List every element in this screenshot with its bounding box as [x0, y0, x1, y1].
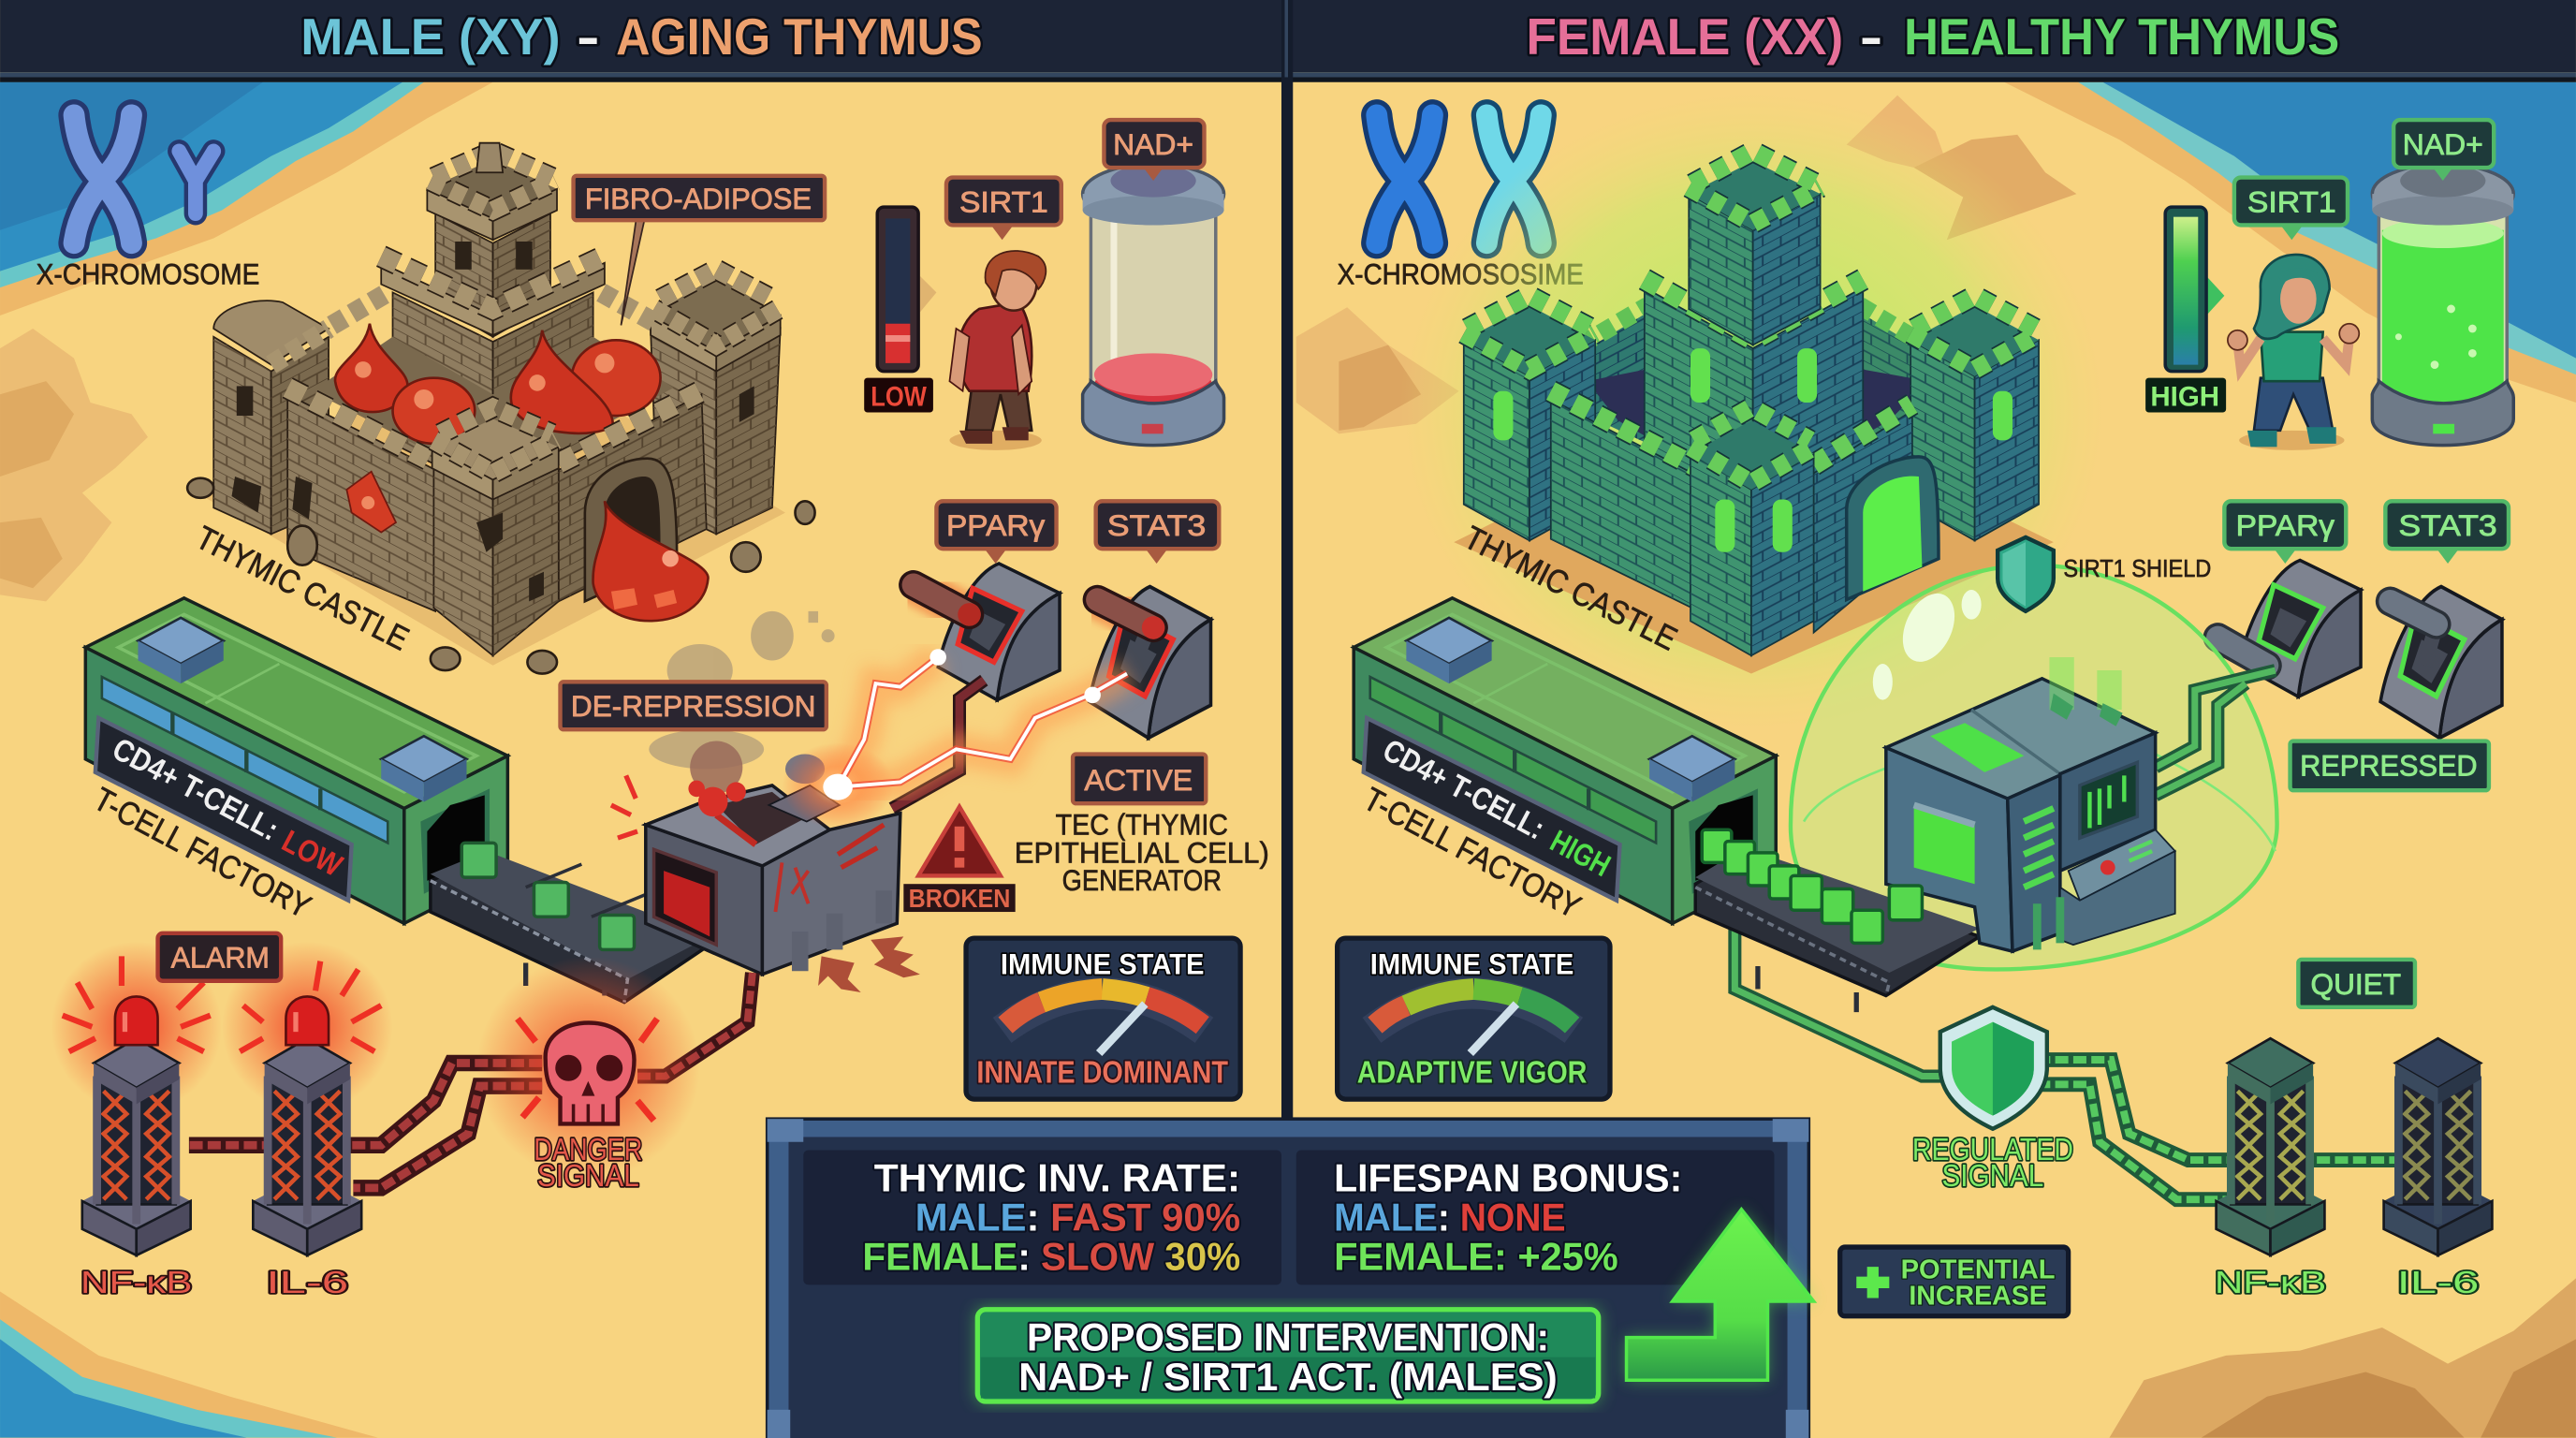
- signal cables: [2037, 1060, 2415, 1199]
- thymic castle, healthy: [1454, 151, 2054, 674]
- panel: male aging thymus: [0, 82, 1269, 1438]
- proposed intervention button: PROPOSED INTERVENTION:: [1027, 1315, 1549, 1359]
- back walls: [1577, 305, 1930, 444]
- HIGH label: HIGH: [2150, 381, 2219, 412]
- active callout: ACTIVE: [1084, 763, 1193, 797]
- sand dunes left: [1296, 307, 1459, 433]
- proposed intervention button: [976, 1308, 1600, 1403]
- T-cell factory: [1354, 598, 1776, 923]
- SIRT1 callout: [946, 178, 1061, 240]
- IL-6 label: IL-6: [266, 1266, 348, 1300]
- chromosome Y: [179, 151, 213, 213]
- front left wall: [1551, 391, 1699, 611]
- castle glow: [1399, 91, 2106, 731]
- TEC generator label: TEC (THYMIC: [1056, 808, 1228, 842]
- rubble: [187, 478, 815, 674]
- cables to switches: [892, 681, 984, 808]
- quiet callout: [2298, 960, 2415, 1007]
- regulated shield icon: [1940, 1007, 2047, 1129]
- front right wall: [559, 391, 707, 601]
- IL-6 alarm tower: [222, 942, 393, 1255]
- title: female: FEMALE (XX): [1526, 8, 1843, 66]
- header bar: [0, 0, 2576, 82]
- front left wall: [287, 388, 435, 611]
- potential increase badge: INCREASE: [1909, 1281, 2047, 1311]
- right tower: [651, 270, 781, 534]
- broken label: BROKEN: [909, 884, 1010, 913]
- chromosome X blue: [1377, 115, 1432, 243]
- SIRT1 level bar low: [877, 207, 936, 372]
- factory label: T-CELL FACTORY: [1357, 781, 1587, 926]
- potential increase badge: POTENTIAL: [1901, 1255, 2056, 1284]
- repressed callout: [2291, 741, 2489, 790]
- NF-kB tower, quiet: [2217, 1038, 2324, 1255]
- alarm callout: [158, 933, 281, 981]
- keep: [381, 257, 605, 493]
- PPAR-gamma callout: PPARγ: [2236, 508, 2334, 542]
- TEC generator label: EPITHELIAL CELL): [1015, 835, 1269, 869]
- front tower: [432, 407, 559, 655]
- callout: fibro-adipose: FIBRO-ADIPOSE: [585, 182, 812, 215]
- SIRT1 shield icon: [1998, 537, 2054, 611]
- X-chromosome label: X-CHROMOSOSIME: [1338, 257, 1584, 291]
- danger signal label: DANGER: [534, 1133, 642, 1167]
- cables to switches: [2156, 670, 2276, 795]
- NF-kB label: NF-κB: [2215, 1266, 2326, 1300]
- chromosome X: [74, 115, 131, 243]
- STAT3 callout: [2385, 501, 2509, 564]
- back wall merlons: [332, 292, 654, 325]
- TEC generator label: [1015, 808, 1269, 897]
- NAD+ callout: [2393, 120, 2494, 181]
- lifespan bonus stats: [1296, 1151, 1774, 1284]
- SIRT1 callout: SIRT1: [959, 184, 1048, 218]
- conveyor belt: [431, 851, 710, 1003]
- repressed callout: REPRESSED: [2300, 748, 2478, 782]
- cable generator to skull: [637, 973, 753, 1077]
- regulated signal label: REGULATED: [1912, 1133, 2073, 1167]
- sand dunes left: [0, 329, 148, 601]
- danger cables: [189, 1064, 542, 1188]
- factory sign: LOW: [276, 824, 348, 884]
- healthy female figure: [2228, 255, 2359, 450]
- lightning arcs: [782, 649, 1127, 829]
- NAD+ tank full: [2372, 165, 2513, 446]
- arrow: potential increase: [1627, 1210, 1814, 1380]
- NAD+ callout: [1104, 120, 1204, 181]
- immune state gauge: male: [966, 938, 1240, 1099]
- courtyard wall behind blobs: [313, 337, 674, 485]
- de-repression callout: [561, 682, 827, 729]
- NAD+ callout: NAD+: [1113, 127, 1193, 161]
- title: female: [1526, 8, 2339, 66]
- danger signal label: SIGNAL: [537, 1159, 639, 1194]
- SIRT1 shield label: SIRT1 SHIELD: [2063, 556, 2211, 582]
- title: male: AGING THYMUS: [616, 8, 983, 66]
- de-repression callout: DE-REPRESSION: [571, 689, 815, 723]
- factory sign: HIGH: [1544, 824, 1616, 884]
- proposed intervention button: NAD+ / SIRT1 ACT. (MALES): [1018, 1355, 1558, 1399]
- conveyor belt: [1695, 848, 1980, 1012]
- SIRT1 level bar high: [2165, 207, 2224, 372]
- IL-6 tower, quiet: [2384, 1038, 2492, 1255]
- left tower: [1464, 296, 1595, 540]
- title: female: -: [1860, 8, 1882, 66]
- front right wall: [1814, 404, 1939, 633]
- inversion rate stats: THYMIC INV. RATE:: [874, 1155, 1240, 1199]
- switch PPAR-gamma active: [914, 564, 1060, 700]
- smoke: [649, 611, 835, 769]
- potential increase badge: [1840, 1247, 2069, 1316]
- immune state gauge: female: [1338, 938, 1610, 1099]
- green T-cell cubes: [461, 843, 634, 949]
- X-chromosome label: X-CHROMOSOME: [37, 257, 259, 291]
- immune state gauge: male: INNATE DOMINANT: [976, 1056, 1228, 1091]
- STAT3 callout: [1096, 501, 1219, 564]
- chromosome X cyan: [1486, 115, 1541, 243]
- danger signal label: [534, 1133, 642, 1194]
- fire and smoke on generator: [611, 741, 746, 838]
- STAT3 callout: STAT3: [1107, 508, 1206, 542]
- switch STAT3 repressed: [2380, 587, 2502, 738]
- title: male: -: [577, 8, 600, 66]
- immune state gauge: male: IMMUNE STATE: [1001, 947, 1204, 981]
- immune state gauge: female: ADAPTIVE VIGOR: [1357, 1056, 1587, 1091]
- big blob at gate: [593, 501, 708, 621]
- spire tower: [1689, 151, 1821, 345]
- tired male figure: [949, 251, 1046, 450]
- thymic castle, ruined: [187, 143, 815, 674]
- quiet callout: QUIET: [2311, 967, 2401, 1001]
- spire tower: [427, 143, 557, 337]
- switch PPAR-gamma repressed: [2217, 560, 2361, 697]
- thymic castle label: THYMIC CASTLE: [1458, 520, 1683, 658]
- T-cell factory: [85, 598, 507, 923]
- dark courtyard gaps: [1587, 368, 1928, 440]
- left tower: [213, 301, 329, 534]
- ocean top right: [2004, 82, 2576, 403]
- broken generator: [646, 755, 900, 975]
- inversion rate stats: [803, 1151, 1281, 1284]
- title: male: MALE (XY): [300, 8, 561, 66]
- lifespan bonus stats: MALE: NONE: [1334, 1196, 1566, 1240]
- title: male: [300, 8, 983, 66]
- STAT3 callout: STAT3: [2398, 508, 2497, 542]
- blood splatter: [818, 936, 920, 992]
- regulated signal label: SIGNAL: [1942, 1159, 2043, 1194]
- LOW label: LOW: [871, 381, 928, 412]
- fibro-adipose blobs: [335, 324, 661, 444]
- lifespan bonus stats: LIFESPAN BONUS:: [1334, 1155, 1682, 1199]
- NAD+ tank low: [1083, 165, 1224, 446]
- inversion rate stats: FEMALE: SLOW 30%: [862, 1235, 1240, 1279]
- keep: [1645, 279, 1863, 513]
- ocean bottom left: [0, 1291, 378, 1438]
- factory label: T-CELL FACTORY: [88, 781, 316, 926]
- icon: danger skull: [476, 956, 700, 1180]
- cable conveyor to shield: [1734, 925, 1947, 1077]
- SIRT1 callout: SIRT1: [2247, 184, 2336, 218]
- PPAR-gamma callout: PPARγ: [946, 508, 1045, 542]
- NF-kB alarm tower: [51, 942, 222, 1255]
- thymic castle label: THYMIC CASTLE: [190, 520, 415, 658]
- healthy generator: [1886, 657, 2175, 951]
- icon: warning triangle: [918, 807, 1001, 875]
- TEC generator label: GENERATOR: [1062, 863, 1222, 897]
- IL-6 label: IL-6: [2397, 1266, 2479, 1300]
- PPAR-gamma callout: [936, 501, 1057, 564]
- inversion rate stats: MALE: FAST 90%: [915, 1196, 1240, 1240]
- PPAR-gamma callout: [2224, 501, 2346, 564]
- factory sign: CD4+ T-CELL:: [107, 732, 284, 848]
- NAD+ callout: NAD+: [2403, 127, 2483, 161]
- front tower: [1690, 407, 1814, 655]
- NF-kB label: NF-κB: [80, 1266, 192, 1300]
- alarm callout: ALARM: [171, 941, 270, 975]
- sand dunes top: [1847, 95, 2076, 240]
- lifespan bonus stats: FEMALE: +25%: [1334, 1235, 1618, 1279]
- active callout: [1073, 755, 1206, 803]
- center divider: [1281, 0, 1293, 1125]
- title: female: HEALTHY THYMUS: [1904, 8, 2339, 66]
- callout: fibro-adipose: [574, 176, 825, 325]
- factory sign: CD4+ T-CELL:: [1377, 733, 1550, 846]
- panel: female healthy thymus: [1296, 82, 2576, 1438]
- SIRT1 callout: [2234, 178, 2348, 240]
- ocean top left: [0, 82, 493, 315]
- SIRT1 dome: [1791, 565, 2277, 969]
- sand dunes bottom right: [2110, 1278, 2576, 1438]
- immune state gauge: female: IMMUNE STATE: [1370, 947, 1573, 981]
- switch STAT3 active: [1090, 587, 1211, 738]
- green T-cell cubes: [1702, 829, 1922, 943]
- right tower: [1910, 296, 2039, 540]
- regulated signal label: [1912, 1133, 2073, 1194]
- stats panel: [768, 1119, 1814, 1438]
